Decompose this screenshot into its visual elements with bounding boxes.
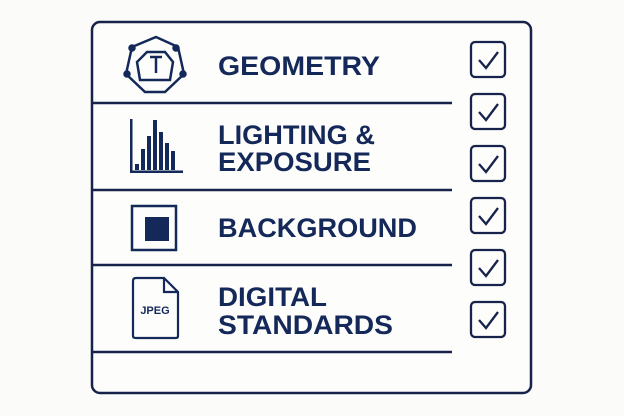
icon: background [132,206,176,250]
text: EXPOSURE [218,147,371,177]
checkboxes [471,42,505,337]
icon: jpeg: JPEG [140,305,170,317]
frame [92,22,531,393]
icon: geometry [124,37,186,92]
icon: jpeg [133,278,178,338]
heading: background: BACKGROUND [218,213,417,243]
heading: digital standards: DIGITAL [218,282,327,312]
heading: geometry: GEOMETRY [218,51,380,81]
text: STANDARDS [218,310,393,340]
icon: histogram [130,119,183,173]
heading: lighting: LIGHTING & [218,120,375,150]
